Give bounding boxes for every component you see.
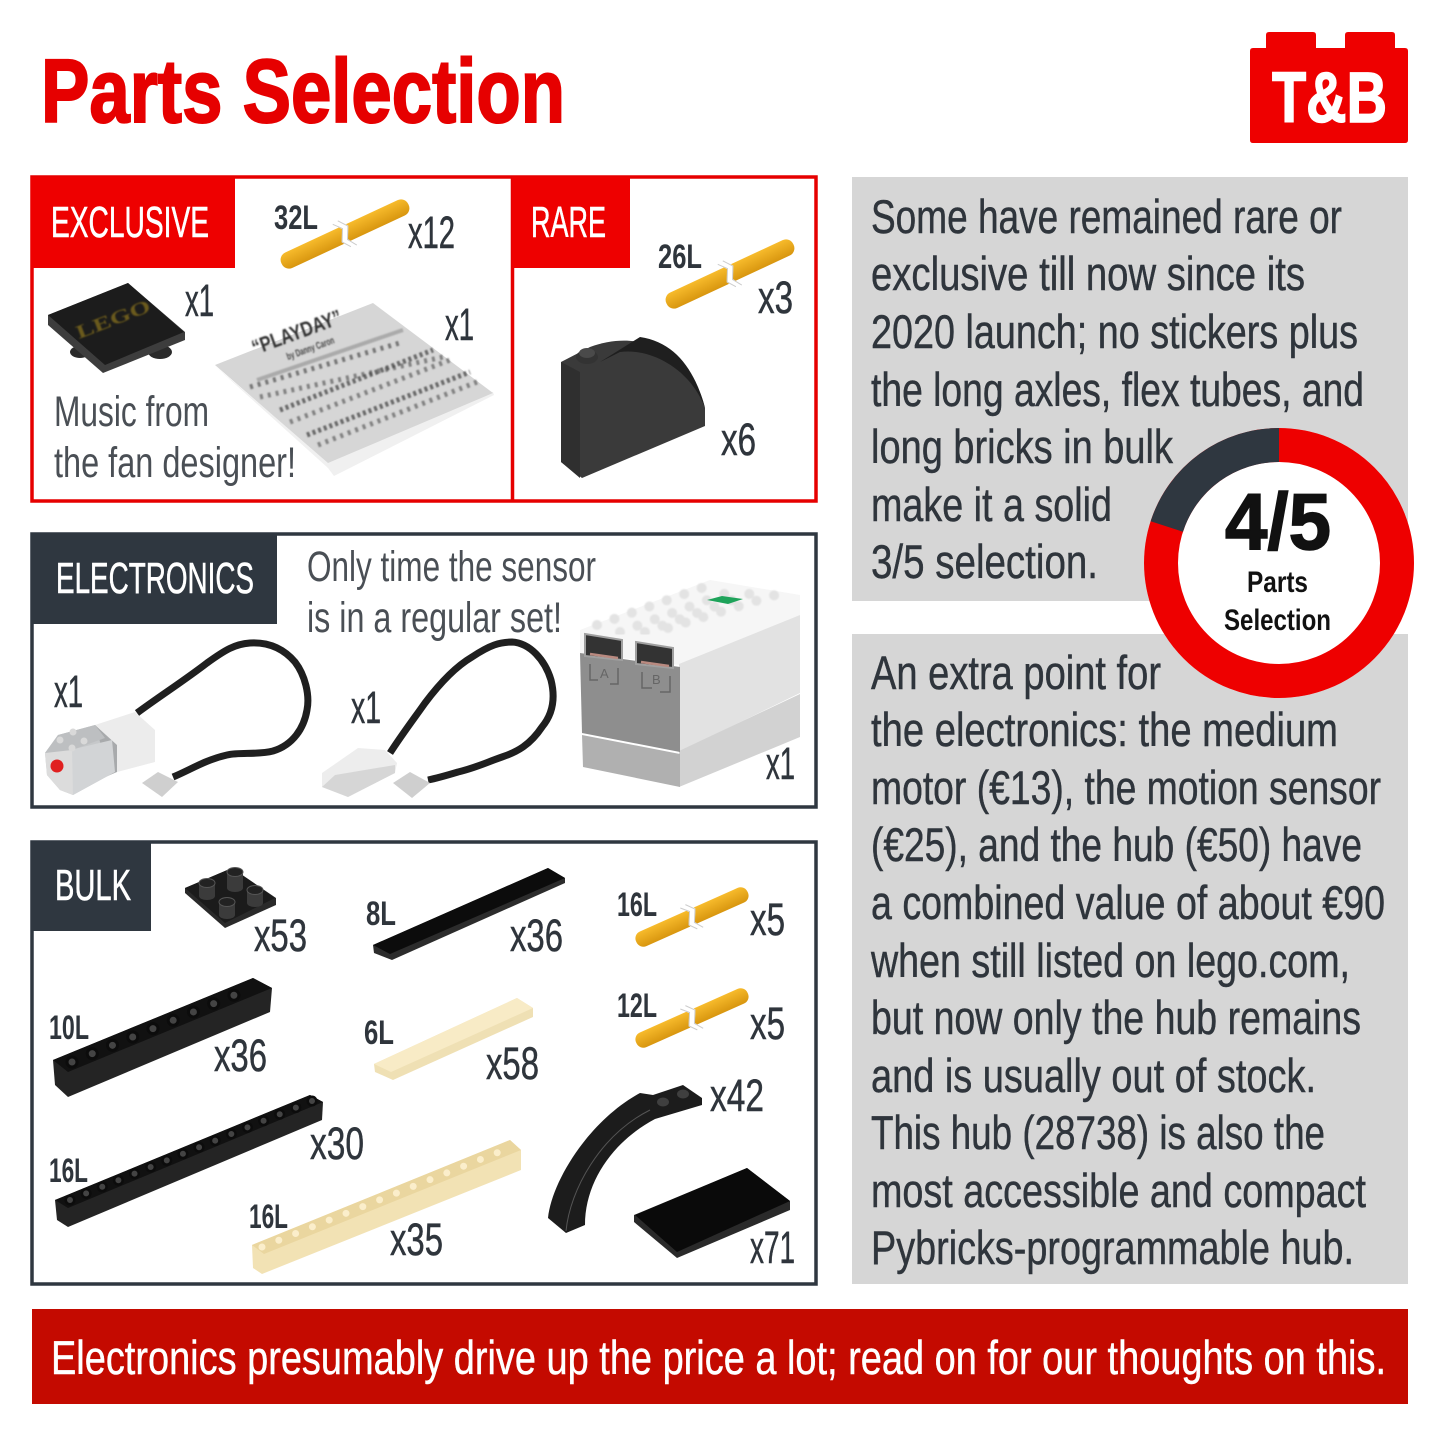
electronics heading: ELECTRONICS xyxy=(56,554,254,603)
panel: electronics value text xyxy=(852,634,1408,1284)
note: music from the fan designer xyxy=(54,388,296,487)
panel: electronics xyxy=(31,533,816,807)
note: music from the fan designer: Music from xyxy=(54,388,209,436)
panel: rating text: exclusive till now since its xyxy=(871,247,1305,300)
LEGO tile x1: x1 xyxy=(185,275,214,326)
12L axle x5: 12L xyxy=(617,987,657,1025)
16L black brick x30: 16L xyxy=(49,1152,88,1190)
32L axle x12: x12 xyxy=(408,207,455,258)
16L tan brick x35 xyxy=(249,1140,521,1274)
hub x1: x1 xyxy=(766,738,795,789)
16L black brick x30: x30 xyxy=(310,1118,364,1169)
6L tan tile x58 xyxy=(364,998,539,1089)
panel: electronics value text: This hub (28738) is also the xyxy=(871,1106,1325,1159)
8L black tile x36: x36 xyxy=(510,910,563,961)
LEGO tile x1 xyxy=(48,275,214,373)
8L black tile x36 xyxy=(366,868,565,961)
plate with studs x53 xyxy=(185,868,307,961)
panel: electronics value text: An extra point for xyxy=(871,646,1161,699)
logo: T&B brick xyxy=(1250,32,1408,143)
bulk heading xyxy=(31,841,151,931)
medium motor x1 xyxy=(45,643,308,797)
10L brick x36 xyxy=(49,978,272,1097)
12L axle x5: x5 xyxy=(750,998,785,1049)
donut score 4/5: Selection xyxy=(1224,604,1331,637)
footer banner xyxy=(32,1309,1408,1404)
donut score 4/5 xyxy=(1144,428,1414,698)
note: music from the fan designer: the fan designer! xyxy=(54,439,296,487)
panel: rating text: long bricks in bulk xyxy=(871,420,1173,473)
32L axle x12 xyxy=(274,191,455,277)
32L axle x12: 32L xyxy=(274,199,318,237)
hub x1: A xyxy=(600,666,609,681)
panel: rating text xyxy=(852,177,1408,601)
16L tan brick x35: x35 xyxy=(390,1214,443,1265)
note: sensor: Only time the sensor xyxy=(307,543,596,591)
music tile x1: “PLAYDAY” xyxy=(249,306,345,360)
title: Parts Selection xyxy=(41,42,565,142)
8L black tile x36: 8L xyxy=(366,895,396,933)
black tile x71: x71 xyxy=(750,1222,795,1273)
donut score 4/5: 4/5 xyxy=(1225,477,1331,566)
curved slope brick x6 xyxy=(561,337,756,478)
10L brick x36: 10L xyxy=(49,1009,89,1047)
motion sensor x1 xyxy=(322,642,553,798)
bulk heading: BULK xyxy=(55,861,131,910)
26L axle x3 xyxy=(658,231,800,323)
exclusive heading: EXCLUSIVE xyxy=(51,198,209,247)
LEGO tile x1: LEGO xyxy=(73,296,154,344)
26L axle x3: x3 xyxy=(758,272,793,323)
arch x42 xyxy=(548,1070,764,1233)
note: sensor: is in a regular set! xyxy=(307,594,562,642)
rare heading xyxy=(512,177,630,268)
black tile x71 xyxy=(634,1168,795,1273)
curved slope brick x6: x6 xyxy=(721,414,756,465)
16L axle x5: x5 xyxy=(750,894,785,945)
medium motor x1: x1 xyxy=(54,666,83,717)
16L black brick x30 xyxy=(49,1095,364,1227)
hub x1: B xyxy=(652,672,661,687)
16L tan brick x35: 16L xyxy=(249,1198,288,1236)
motion sensor x1: x1 xyxy=(351,682,381,733)
6L tan tile x58: 6L xyxy=(364,1014,394,1052)
exclusive heading xyxy=(31,177,235,268)
note: sensor xyxy=(307,543,596,642)
panel: electronics value text: and is usually out of stock. xyxy=(871,1049,1316,1102)
donut score 4/5: Parts xyxy=(1247,566,1308,599)
panel: electronics value text: the electronics: the medium xyxy=(871,703,1338,756)
panel: bulk xyxy=(31,841,816,1284)
6L tan tile x58: x58 xyxy=(486,1038,539,1089)
panel: exclusive and rare xyxy=(31,177,816,501)
panel: rating text: make it a solid xyxy=(871,478,1112,531)
16L axle x5: 16L xyxy=(617,886,657,924)
logo: T&B brick: T&B xyxy=(1272,59,1387,138)
hub x1 xyxy=(580,580,800,789)
music tile x1: x1 xyxy=(445,299,474,350)
rare heading: RARE xyxy=(531,198,606,247)
12L axle x5 xyxy=(617,980,785,1056)
music tile x1: by Danny Caron xyxy=(285,335,336,363)
electronics heading xyxy=(31,533,277,624)
26L axle x3: 26L xyxy=(658,238,702,276)
panel: rating text: 3/5 selection. xyxy=(871,535,1098,588)
arch x42: x42 xyxy=(710,1070,764,1121)
music tile x1 xyxy=(215,299,494,476)
16L axle x5 xyxy=(617,879,785,955)
plate with studs x53: x53 xyxy=(254,910,307,961)
10L brick x36: x36 xyxy=(214,1030,267,1081)
